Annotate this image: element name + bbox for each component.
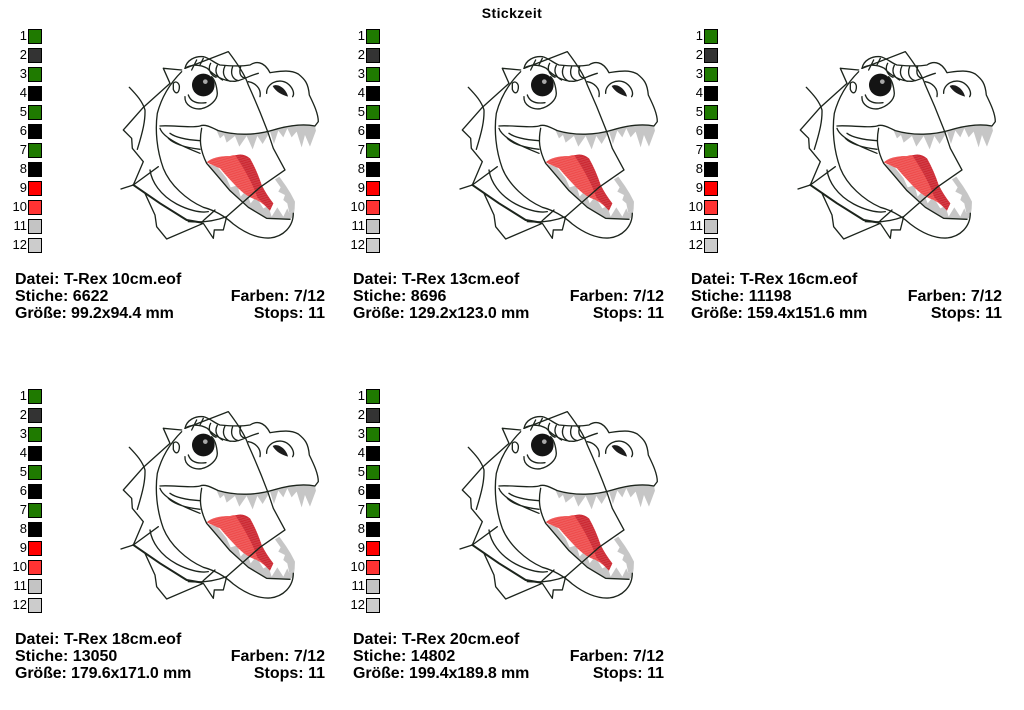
color swatch list: 9 — [358, 180, 365, 195]
color swatch list: 4 — [20, 85, 27, 100]
panel: T-Rex 20cm — [351, 388, 664, 682]
stitch count: Stiche: 14802 — [353, 648, 455, 665]
panel: T-Rex 13cm — [351, 28, 664, 322]
color swatch list: 12 — [351, 597, 365, 612]
color swatch list: 2 — [20, 407, 27, 422]
color swatch list: 4 — [696, 85, 703, 100]
file name: Datei: T-Rex 10cm.eof — [15, 271, 181, 288]
color swatch list: 5 — [358, 104, 365, 119]
stitch count: Stiche: 8696 — [353, 288, 446, 305]
file name: Datei: T-Rex 13cm.eof — [353, 271, 519, 288]
color swatch list: 8 — [20, 161, 27, 176]
color swatch list: 12 — [351, 237, 365, 252]
stops count: Stops: 11 — [593, 665, 664, 682]
color swatch list — [351, 28, 380, 253]
color swatch list — [689, 28, 718, 253]
size: Größe: 99.2x94.4 mm — [15, 305, 174, 322]
color swatch list: 9 — [358, 540, 365, 555]
color swatch list: 11 — [352, 578, 365, 593]
color swatch list: 1 — [20, 388, 27, 403]
title: Stickzeit — [482, 5, 542, 21]
file name: Datei: T-Rex 16cm.eof — [691, 271, 857, 288]
color swatch list: 11 — [352, 218, 365, 233]
color swatch list: 3 — [358, 426, 365, 441]
color swatch list: 7 — [20, 142, 27, 157]
embroidery preview: T-Rex — [797, 51, 996, 240]
color swatch list: 10 — [351, 559, 365, 574]
color swatch list: 7 — [696, 142, 703, 157]
color swatch list: 6 — [20, 123, 27, 138]
color swatch list: 8 — [358, 161, 365, 176]
color swatch list: 11 — [14, 218, 27, 233]
stops count: Stops: 11 — [593, 305, 664, 322]
color swatch list: 9 — [20, 180, 27, 195]
color swatch list: 1 — [20, 28, 27, 43]
color swatch list: 6 — [358, 483, 365, 498]
color swatch list: 3 — [358, 66, 365, 81]
color swatch list: 11 — [690, 218, 703, 233]
size: Größe: 159.4x151.6 mm — [691, 305, 867, 322]
color swatch list: 1 — [358, 28, 365, 43]
color swatch list: 7 — [358, 502, 365, 517]
color swatch list: 10 — [351, 199, 365, 214]
color swatch list — [13, 28, 42, 253]
colors count: Farben: 7/12 — [570, 288, 664, 305]
color swatch list: 10 — [13, 559, 27, 574]
embroidery preview: T-Rex — [120, 411, 319, 600]
file name: Datei: T-Rex 18cm.eof — [15, 631, 181, 648]
color swatch list: 6 — [20, 483, 27, 498]
color swatch list: 12 — [13, 237, 27, 252]
color swatch list — [351, 388, 380, 613]
color swatch list: 5 — [358, 464, 365, 479]
panel: T-Rex 18cm — [13, 388, 325, 682]
color swatch list: 4 — [358, 85, 365, 100]
color swatch list: 2 — [358, 47, 365, 62]
color swatch list: 2 — [696, 47, 703, 62]
file name: Datei: T-Rex 20cm.eof — [353, 631, 519, 648]
color swatch list: 1 — [696, 28, 703, 43]
color swatch list: 12 — [689, 237, 703, 252]
color swatch list: 10 — [13, 199, 27, 214]
color swatch list: 7 — [20, 502, 27, 517]
size: Größe: 179.6x171.0 mm — [15, 665, 191, 682]
color swatch list: 6 — [358, 123, 365, 138]
size: Größe: 129.2x123.0 mm — [353, 305, 529, 322]
color swatch list: 11 — [14, 578, 27, 593]
stops count: Stops: 11 — [254, 305, 325, 322]
color swatch list: 5 — [696, 104, 703, 119]
colors count: Farben: 7/12 — [231, 648, 325, 665]
color swatch list: 10 — [689, 199, 703, 214]
color swatch list: 1 — [358, 388, 365, 403]
color swatch list: 2 — [358, 407, 365, 422]
stitch count: Stiche: 11198 — [691, 288, 792, 305]
embroidery preview: T-Rex — [459, 51, 658, 240]
color swatch list: 8 — [696, 161, 703, 176]
color swatch list: 5 — [20, 464, 27, 479]
color swatch list — [13, 388, 42, 613]
color swatch list: 3 — [696, 66, 703, 81]
stops count: Stops: 11 — [931, 305, 1002, 322]
colors count: Farben: 7/12 — [231, 288, 325, 305]
color swatch list: 6 — [696, 123, 703, 138]
color swatch list: 8 — [358, 521, 365, 536]
stitch count: Stiche: 13050 — [15, 648, 117, 665]
color swatch list: 12 — [13, 597, 27, 612]
embroidery preview: T-Rex — [459, 411, 658, 600]
color swatch list: 2 — [20, 47, 27, 62]
color swatch list: 3 — [20, 426, 27, 441]
color swatch list: 4 — [20, 445, 27, 460]
color swatch list: 9 — [696, 180, 703, 195]
colors count: Farben: 7/12 — [908, 288, 1002, 305]
color swatch list: 8 — [20, 521, 27, 536]
panel: T-Rex 10cm — [13, 28, 325, 322]
color swatch list: 5 — [20, 104, 27, 119]
size: Größe: 199.4x189.8 mm — [353, 665, 529, 682]
color swatch list: 7 — [358, 142, 365, 157]
panel: T-Rex 16cm — [689, 28, 1002, 322]
color swatch list: 4 — [358, 445, 365, 460]
color swatch list: 9 — [20, 540, 27, 555]
color swatch list: 3 — [20, 66, 27, 81]
embroidery preview: T-Rex — [120, 51, 319, 240]
stops count: Stops: 11 — [254, 665, 325, 682]
colors count: Farben: 7/12 — [570, 648, 664, 665]
stitch count: Stiche: 6622 — [15, 288, 108, 305]
